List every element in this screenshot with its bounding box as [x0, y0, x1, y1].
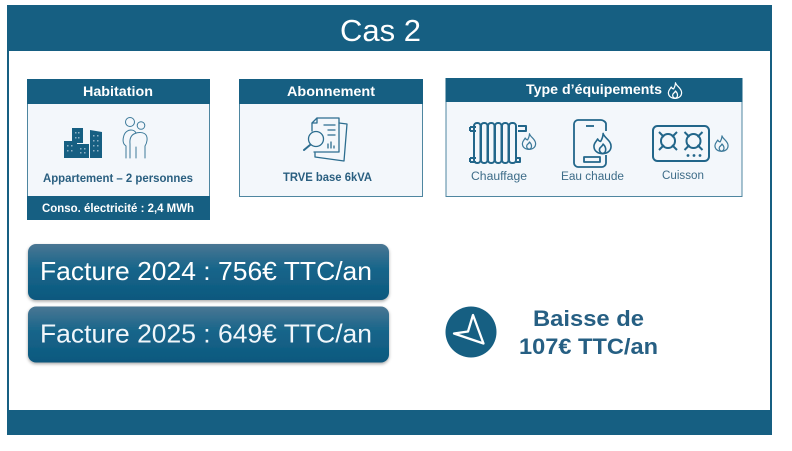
Abonnement header: Abonnement: [287, 84, 376, 99]
icon: water heater flame: [594, 133, 611, 154]
icon: radiator flame: [522, 134, 536, 149]
header band with title: [7, 5, 772, 51]
text: Cuisson: Cuisson: [662, 170, 704, 182]
callout: savings: [519, 306, 658, 359]
icon: gas hob: [653, 126, 709, 161]
bill 2024 button: [28, 244, 389, 300]
text: housing type: Appartement – 2 personnes: [43, 173, 193, 185]
equipment header: [446, 78, 742, 102]
icon: downward arrow circle: [446, 306, 496, 358]
icon: header flame: [668, 83, 682, 98]
text: Eau chaude: Eau chaude: [561, 171, 624, 183]
icon: hob flame: [715, 136, 728, 151]
header band with title: Cas 2: [340, 13, 421, 48]
icon: water heater: [574, 120, 606, 167]
equipment header: Type d’équipements: [526, 82, 662, 97]
text: subscription: TRVE base 6kVA: [283, 172, 372, 184]
bill 2025 button: [28, 306, 389, 362]
bill 2025 button: Facture 2025 : 649€ TTC/an: [40, 318, 372, 348]
icon: document with magnifier: [304, 118, 347, 161]
panel: Abonnement: [239, 79, 423, 196]
icon: apartment buildings: [64, 128, 102, 158]
footer band: [7, 410, 772, 435]
panel: Habitation: [27, 79, 210, 220]
text: Chauffage: Chauffage: [471, 171, 527, 183]
icon: radiator: [470, 123, 526, 163]
consumption bar: [27, 196, 210, 220]
panel: Type d'équipements: [446, 78, 742, 196]
callout: savings: Baisse de: [533, 306, 644, 331]
Habitation header: [27, 79, 210, 104]
consumption bar: Conso. électricité : 2,4 MWh: [42, 203, 194, 215]
Habitation header: Habitation: [83, 84, 153, 99]
Abonnement header: [239, 79, 423, 104]
callout: savings: 107€ TTC/an: [519, 334, 658, 359]
bill 2024 button: Facture 2024 : 756€ TTC/an: [40, 256, 372, 286]
icon: two people: [123, 118, 147, 158]
